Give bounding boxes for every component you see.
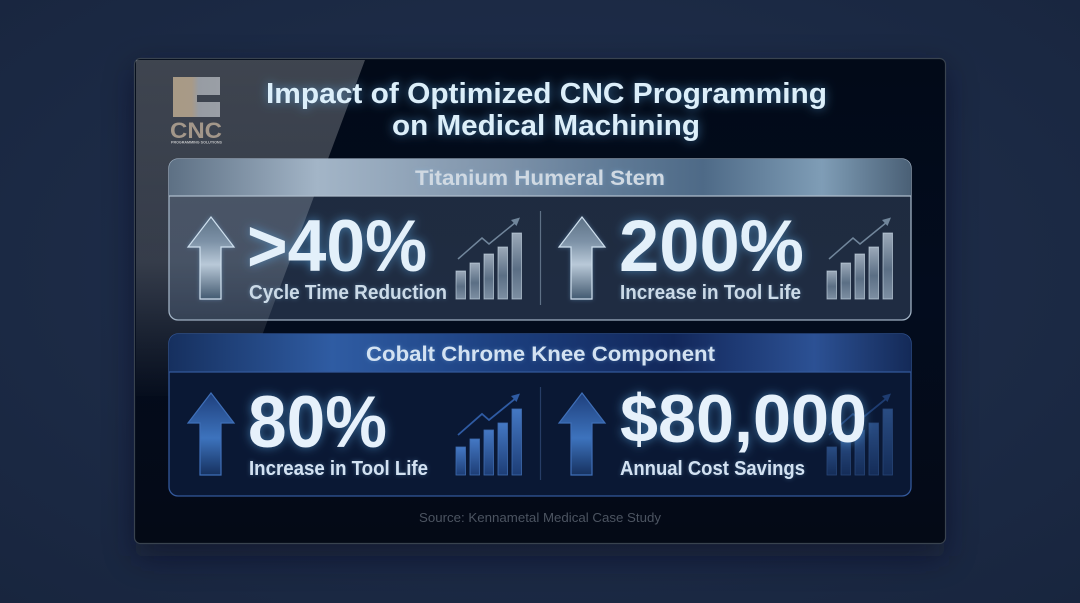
panel header: Titanium Humeral Stem — [169, 159, 911, 196]
panel header: Titanium Humeral Stem: Titanium Humeral Stem — [415, 167, 665, 190]
panel: Titanium Humeral Stem — [169, 159, 911, 320]
icon: growth bar chart — [827, 394, 892, 475]
label: Cycle Time Reduction: Cycle Time Reduction — [249, 282, 447, 304]
value: $80,000: $80,000 — [620, 381, 867, 457]
icon: growth bar chart — [456, 394, 522, 475]
title — [266, 78, 827, 142]
label: Increase in Tool Life: Increase in Tool Life — [249, 458, 428, 480]
panel: dark screen frame — [134, 58, 946, 556]
icon: up arrow — [188, 217, 234, 299]
logo: CNC Programming Solutions: CNC — [170, 118, 222, 143]
title: Impact of Optimized CNC Programming — [266, 78, 827, 110]
title: on Medical Machining — [392, 110, 700, 142]
icon: growth bar chart — [456, 218, 522, 299]
value: 80%: 80% — [248, 382, 387, 463]
icon: up arrow — [188, 393, 234, 475]
value: 200%: 200% — [619, 206, 804, 287]
value: >40%: >40% — [247, 206, 427, 287]
logo: CNC Programming Solutions: PROGRAMMING SOLUTIONS — [171, 140, 222, 144]
panel header: Cobalt Chrome Knee Component — [169, 334, 911, 372]
label: Annual Cost Savings: Annual Cost Savings — [620, 458, 805, 480]
metric: $80,000 Annual Cost Savings — [559, 381, 892, 480]
metric: >40% Cycle Time Reduction — [188, 206, 522, 304]
label: Increase in Tool Life: Increase in Tool Life — [620, 282, 801, 304]
icon: growth bar chart — [827, 218, 892, 299]
panel header: Cobalt Chrome Knee Component: Cobalt Chrome Knee Component — [366, 343, 715, 366]
icon: up arrow — [559, 217, 605, 299]
icon: up arrow — [559, 393, 605, 475]
metric: 200% Increase in Tool Life — [559, 206, 892, 304]
logo: CNC Programming Solutions — [170, 77, 222, 144]
panel: Cobalt Chrome Knee Component — [169, 334, 911, 496]
metric: 80% Increase in Tool Life — [188, 382, 522, 480]
source note: Source: Kennametal Medical Case Study — [419, 511, 662, 525]
